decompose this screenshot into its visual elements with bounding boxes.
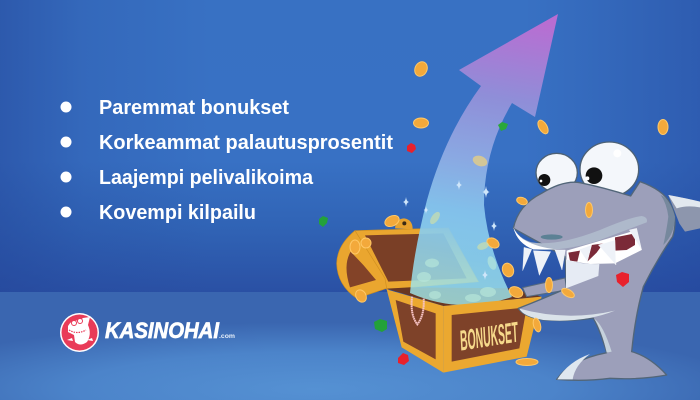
chest lid back frame	[355, 228, 478, 289]
bullet 4: Kovempi kilpailu	[99, 202, 256, 224]
shark	[513, 142, 700, 380]
chest rim inner	[387, 287, 542, 306]
chest left panel	[396, 300, 436, 359]
logo domain: .com	[219, 333, 235, 340]
bullet 2: Korkeammat palautusprosentit	[99, 132, 393, 154]
shark gums	[568, 233, 635, 262]
sparkles	[403, 180, 497, 280]
floor	[0, 292, 700, 400]
shark body	[513, 182, 675, 380]
gold coins	[350, 60, 668, 365]
gems	[319, 122, 629, 365]
chest lid side panel	[346, 252, 376, 287]
red gem on shark	[616, 272, 629, 287]
treasure chest back and lid	[337, 218, 542, 306]
shark upper lip	[513, 216, 647, 250]
background wall	[0, 0, 700, 293]
green gem by chest	[374, 319, 387, 332]
shark arm highlight	[519, 309, 615, 321]
red gem by chest	[398, 353, 409, 365]
shark mouth	[567, 230, 642, 264]
shark snout highlight	[513, 227, 557, 249]
bullet 3: Laajempi pelivalikoima	[99, 167, 314, 189]
shark nostril	[541, 234, 563, 240]
shark left eye	[536, 153, 577, 192]
shark belly highlight	[594, 318, 612, 353]
bullet list	[60, 97, 393, 224]
logo badge	[60, 313, 99, 352]
chest right face	[443, 297, 542, 373]
shark back fin highlight	[668, 195, 700, 208]
shark rear edge shade	[661, 195, 675, 245]
treasure chest front: BONUKSET	[459, 316, 519, 358]
green gem	[498, 122, 508, 131]
red gem	[407, 143, 416, 153]
pale coins in beam	[417, 154, 498, 302]
chest lid clasp	[395, 218, 413, 229]
shark tail highlight	[557, 354, 590, 379]
logo wordmark: KASINOHAI	[105, 318, 220, 343]
chest lid inner planks	[365, 233, 467, 282]
rising arrow	[410, 14, 558, 305]
logo: Kasinohai	[60, 313, 235, 352]
shark teeth	[523, 228, 642, 275]
bullet 1: Paremmat bonukset	[99, 97, 289, 119]
pearl necklace	[412, 297, 424, 324]
chest right panel	[452, 307, 527, 362]
shark right eye	[580, 142, 639, 197]
chest left face	[387, 289, 443, 373]
green gem left	[319, 216, 328, 227]
shark chin	[566, 259, 599, 288]
treasure chest front	[387, 289, 542, 373]
shark upper arm	[523, 278, 567, 297]
shark back fin	[668, 195, 700, 232]
chest lid side	[337, 231, 387, 298]
wall edge shading	[0, 0, 700, 293]
